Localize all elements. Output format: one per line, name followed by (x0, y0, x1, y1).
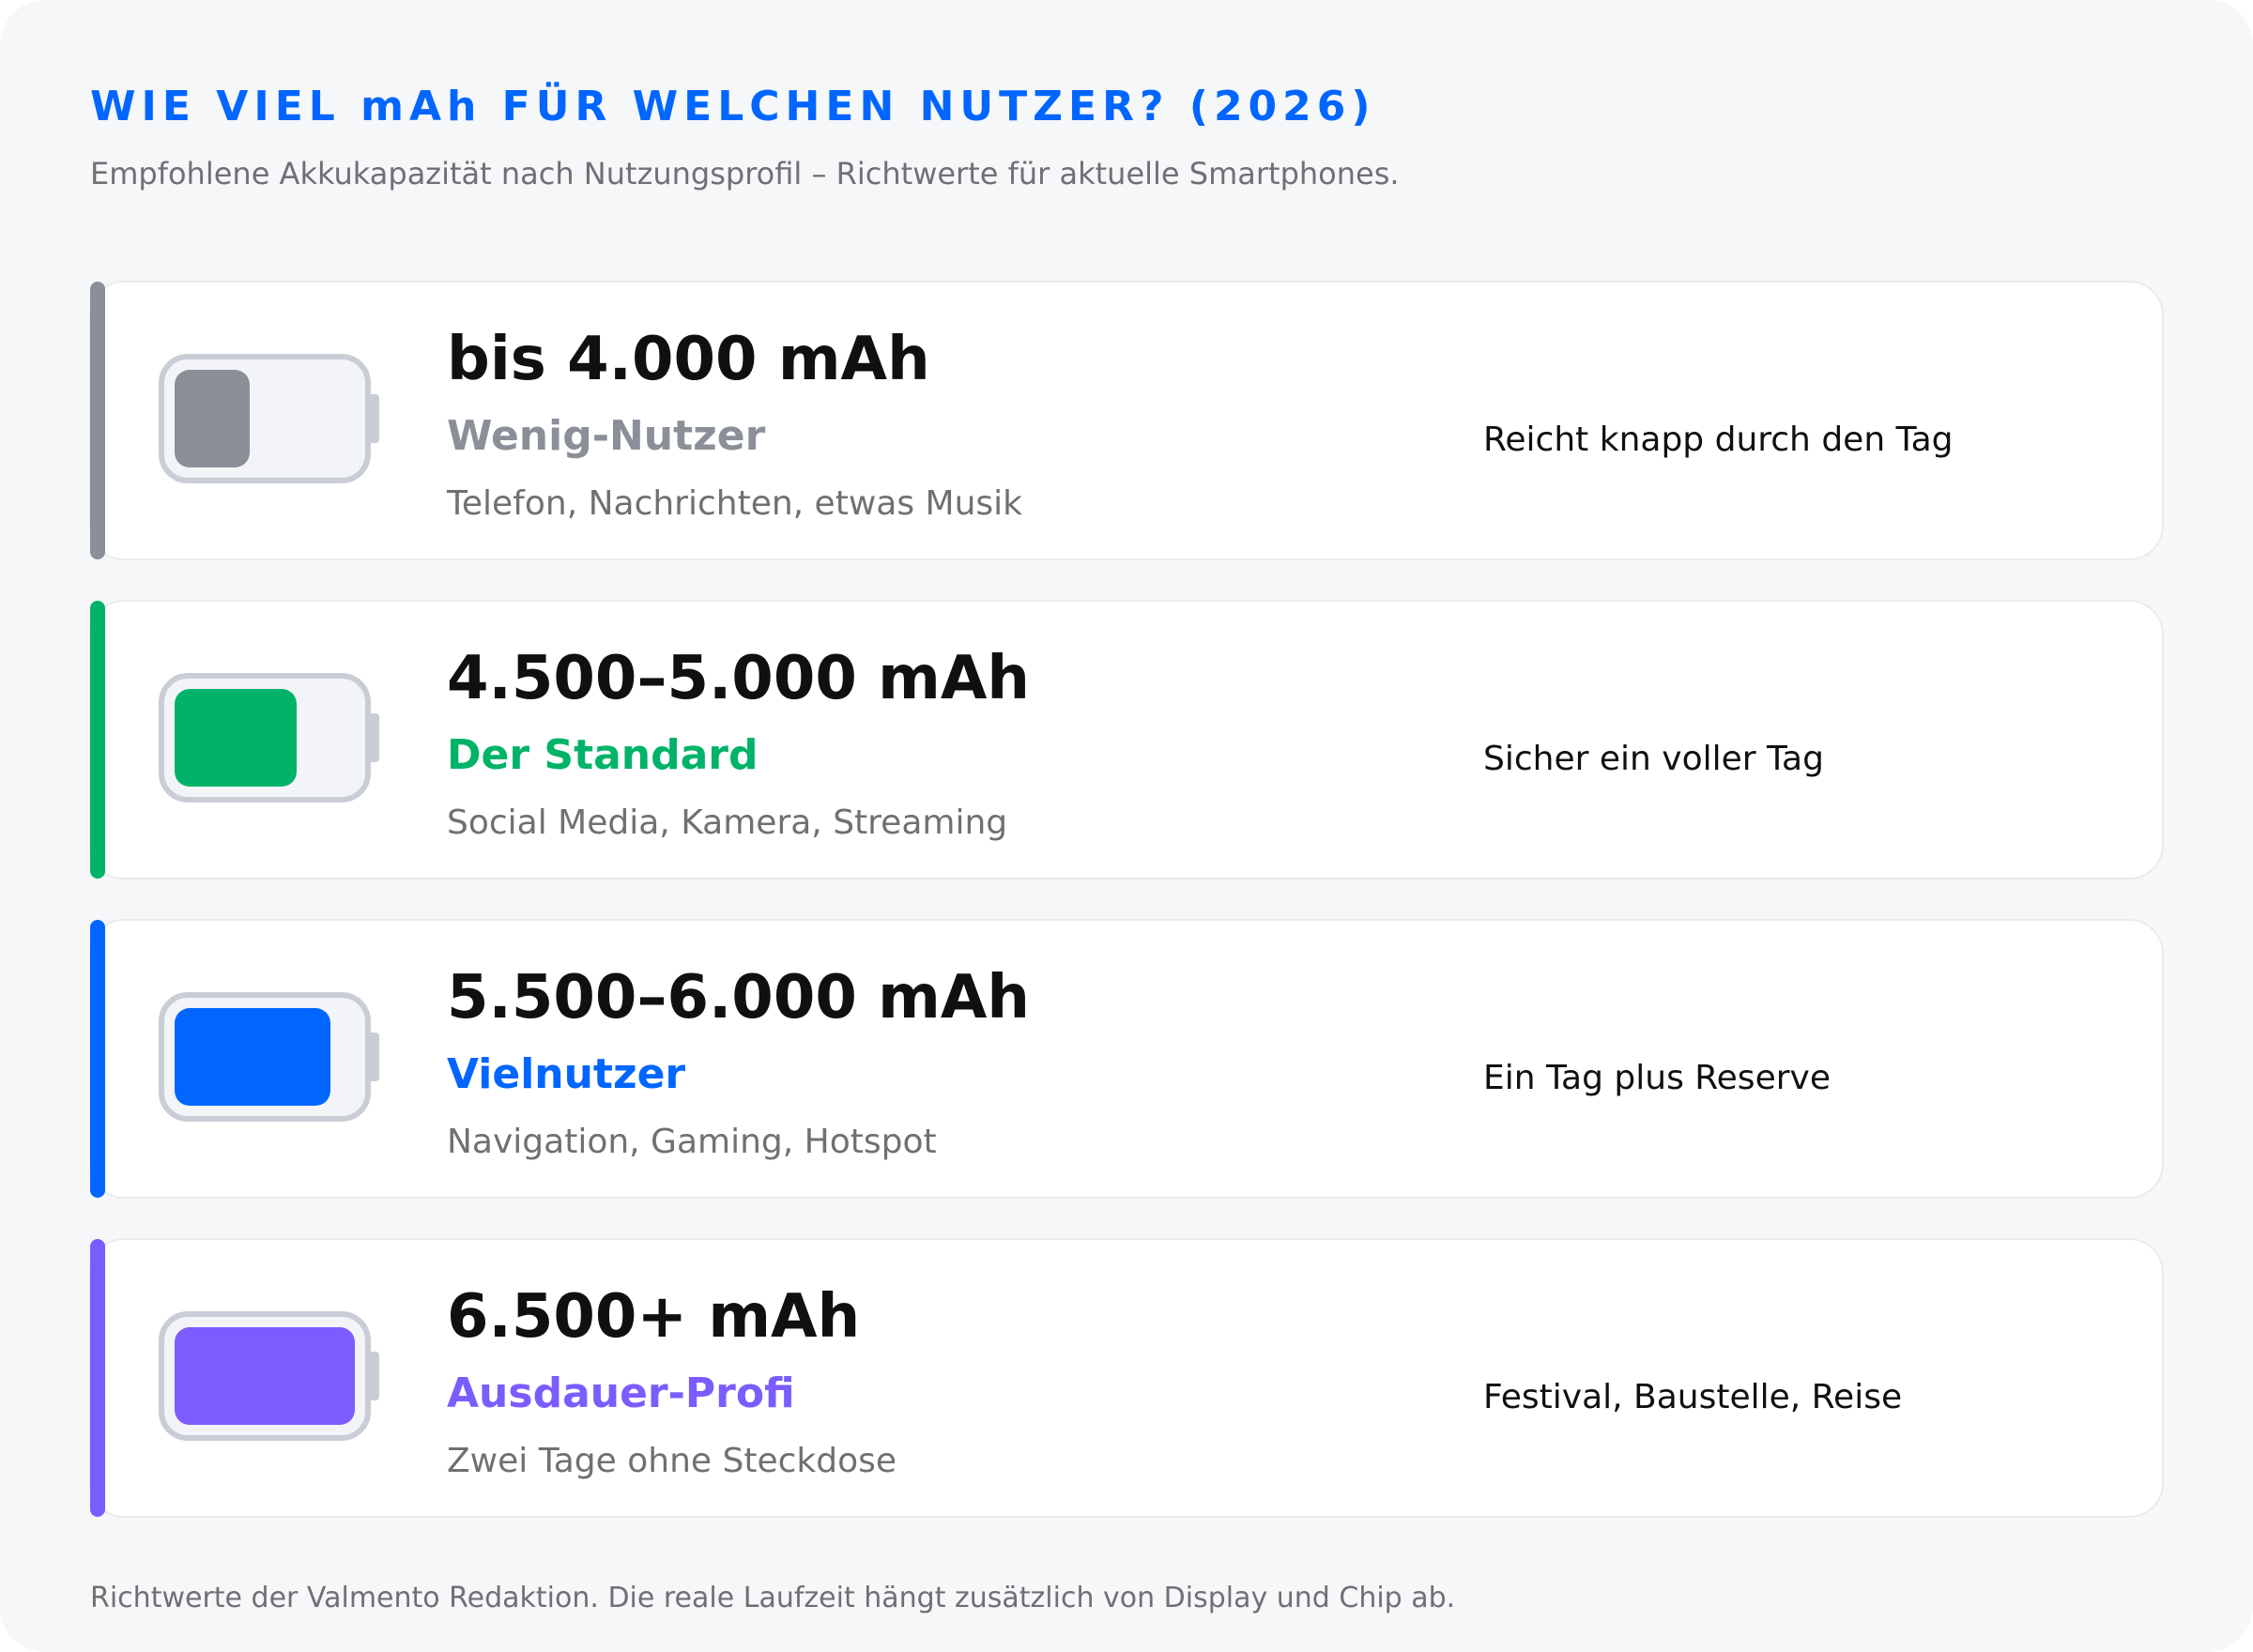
user type: Ausdauer-Profi (447, 1369, 795, 1417)
usage description: Telefon, Nachrichten, etwas Musik (446, 484, 1022, 523)
icon: battery 68 percent (161, 676, 379, 800)
accent bar (90, 920, 105, 1198)
runtime note: Reicht knapp durch den Tag (1483, 421, 1954, 459)
capacity: bis 4.000 mAh (447, 325, 930, 394)
panel: Vielnutzer (90, 920, 2163, 1198)
panel: Wenig-Nutzer (90, 282, 2163, 559)
capacity: 5.500–6.000 mAh (447, 963, 1030, 1032)
panel: Der Standard (90, 601, 2163, 879)
runtime note: Festival, Baustelle, Reise (1483, 1378, 1902, 1416)
icon: battery 40 percent (161, 357, 379, 481)
card background (90, 920, 2163, 1198)
usage description: Zwei Tage ohne Steckdose (447, 1442, 897, 1480)
accent bar (90, 1239, 105, 1517)
title: WIE VIEL mAh FÜR WELCHEN NUTZER? (2026) (90, 81, 1376, 130)
card background (90, 282, 2163, 559)
capacity: 4.500–5.000 mAh (447, 644, 1030, 713)
subtitle: Empfohlene Akkukapazität nach Nutzungsprofil – Richtwerte für aktuelle Smartphones. (90, 156, 1400, 191)
usage description: Social Media, Kamera, Streaming (447, 803, 1007, 842)
icon: battery 87 percent (161, 995, 379, 1119)
panel: Ausdauer-Profi (90, 1239, 2163, 1517)
user type: Der Standard (447, 731, 759, 779)
user type: Vielnutzer (447, 1050, 685, 1098)
usage description: Navigation, Gaming, Hotspot (447, 1123, 937, 1161)
capacity: 6.500+ mAh (447, 1282, 860, 1352)
runtime note: Sicher ein voller Tag (1483, 740, 1824, 778)
accent bar (90, 601, 105, 879)
runtime note: Ein Tag plus Reserve (1483, 1059, 1831, 1097)
user type: Wenig-Nutzer (447, 412, 766, 460)
accent bar (90, 282, 105, 559)
card background (90, 601, 2163, 879)
card background (90, 1239, 2163, 1517)
footnote: Richtwerte der Valmento Redaktion. Die reale Laufzeit hängt zusätzlich von Display und Chip ab. (90, 1582, 1455, 1614)
icon: battery full (161, 1314, 379, 1438)
